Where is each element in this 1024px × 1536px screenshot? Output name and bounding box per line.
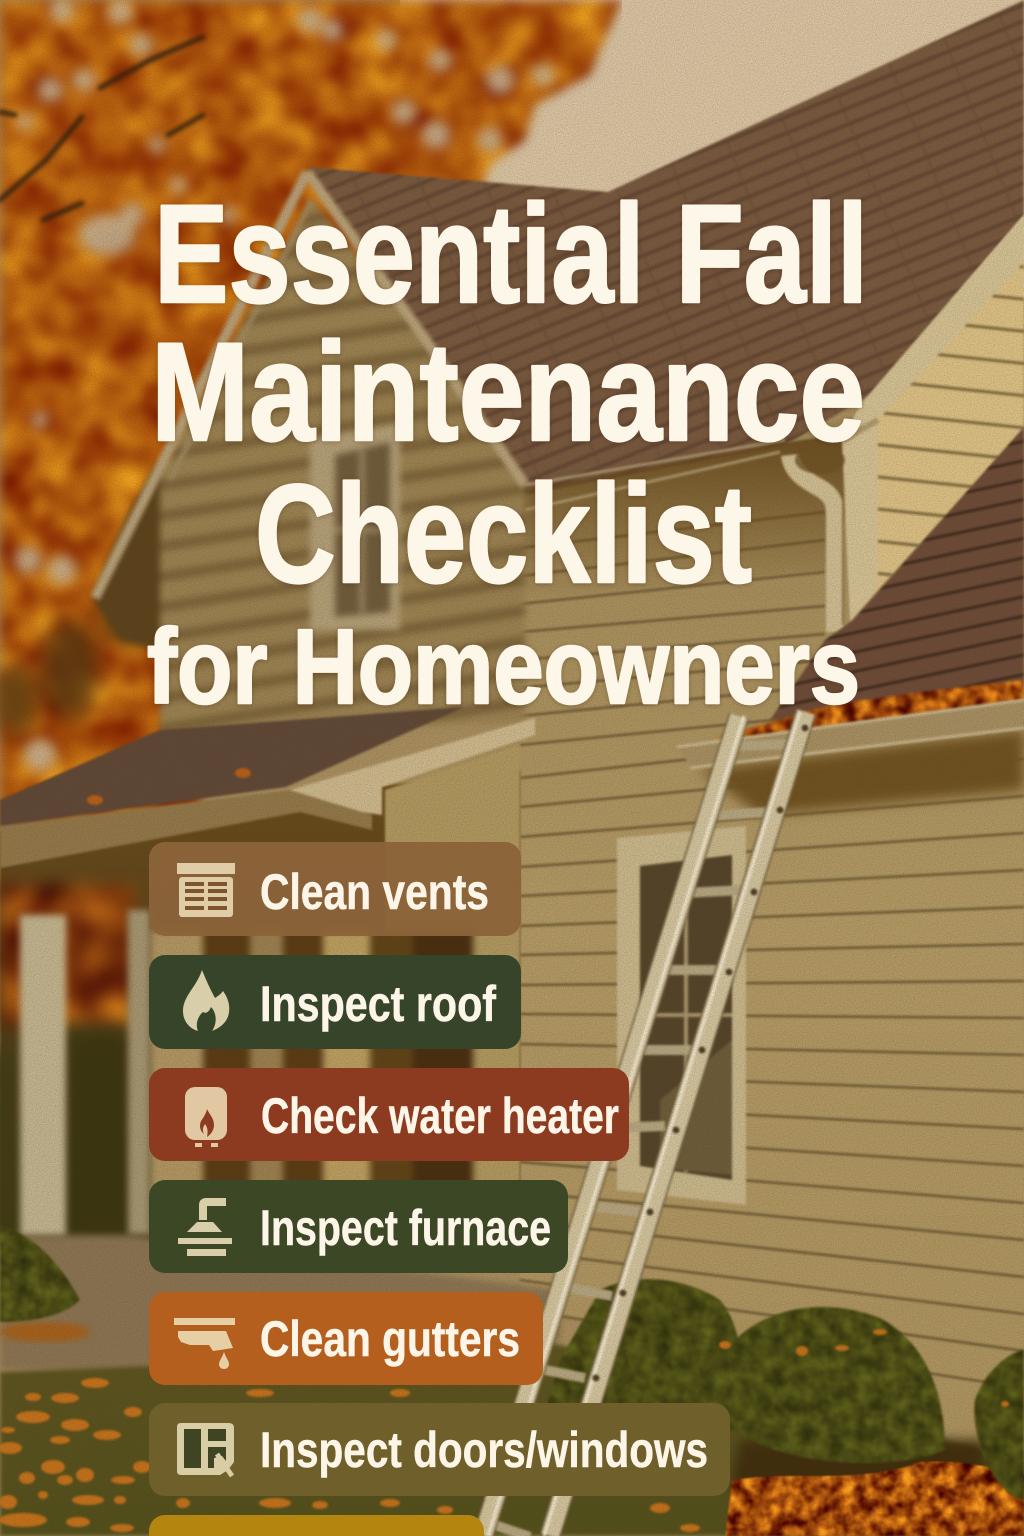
- item: Clean gutters: [149, 1292, 543, 1385]
- checklist: [149, 842, 730, 1536]
- title line: Maintenance: Maintenance: [151, 313, 865, 470]
- gutter shadow: [700, 730, 1024, 815]
- item: Inspect roof: [149, 955, 521, 1049]
- item: Check water heater: Check water heater: [261, 1088, 619, 1144]
- sky: [400, 0, 1024, 300]
- ladder rungs: [480, 744, 797, 1536]
- fallen leaves: [0, 1329, 1009, 1532]
- icon: water heater: [185, 1087, 227, 1147]
- item: Inspect furnace: Inspect furnace: [260, 1200, 551, 1256]
- walkway: [0, 1235, 560, 1372]
- title line: for Homeowners: for Homeowners: [147, 608, 860, 726]
- ladder rails: [483, 712, 806, 1536]
- lawn: [0, 1340, 1024, 1536]
- downspout: [790, 455, 835, 632]
- icon: door and window: [177, 1423, 234, 1476]
- item: Inspect furnace: [149, 1180, 568, 1273]
- porch roof: [0, 707, 535, 868]
- porch shadow: [0, 770, 520, 1245]
- orange leaf smear: [0, 1322, 90, 1342]
- gable wall shade: [93, 460, 160, 650]
- bushes: [0, 1226, 1024, 1500]
- title line: Essential Fall: Essential Fall: [154, 175, 868, 332]
- upper left gable wall: [93, 200, 525, 735]
- right gable: [790, 215, 1024, 632]
- porch right wall: [385, 745, 520, 1245]
- icon: furnace: [178, 1202, 232, 1256]
- title line: Checklist: Checklist: [255, 455, 752, 612]
- item: Check water heater: [149, 1068, 629, 1161]
- item: Inspect doors/windows: [149, 1403, 730, 1496]
- ladder rails dark edge: [483, 712, 806, 1536]
- fascia and soffit: [520, 430, 870, 600]
- item: Clean vents: [149, 842, 521, 936]
- porch dark bays left: [0, 1030, 130, 1240]
- porch columns and dark bays: [150, 930, 473, 1235]
- right window: [617, 826, 746, 1205]
- fallen leaf bed right: [725, 1461, 1024, 1536]
- icon: vent: [177, 863, 235, 917]
- item: Clean vents: Clean vents: [260, 864, 489, 920]
- dark tree mass lower left: [0, 596, 160, 736]
- porch left foliage: [0, 885, 135, 1025]
- sky gaps in foliage: [15, 0, 554, 771]
- ladder: [480, 712, 809, 1536]
- gutter leaves: [715, 680, 1024, 738]
- item: Clean gutters: Clean gutters: [260, 1311, 520, 1367]
- ladder rivets: [592, 724, 809, 1382]
- icon: flame: [183, 970, 229, 1031]
- bush shadow on ground: [730, 1440, 985, 1490]
- autumn tree canopy: [0, 0, 622, 900]
- item: Inspect roof: Inspect roof: [260, 976, 496, 1032]
- tree branches: [0, 37, 203, 220]
- right gutter: [677, 700, 1024, 768]
- main house wall with siding: [520, 380, 1024, 1460]
- gable window: [310, 422, 400, 630]
- item: partially visible yellow button: [149, 1515, 484, 1536]
- lower right roof: [677, 427, 1024, 815]
- icon: gutter: [174, 1318, 235, 1369]
- gable trim: [95, 172, 525, 598]
- title: [147, 175, 868, 726]
- item: Inspect doors/windows: Inspect doors/windows: [260, 1422, 708, 1478]
- porch column shafts: [20, 910, 150, 1237]
- big roof with shingles: [307, 0, 1024, 495]
